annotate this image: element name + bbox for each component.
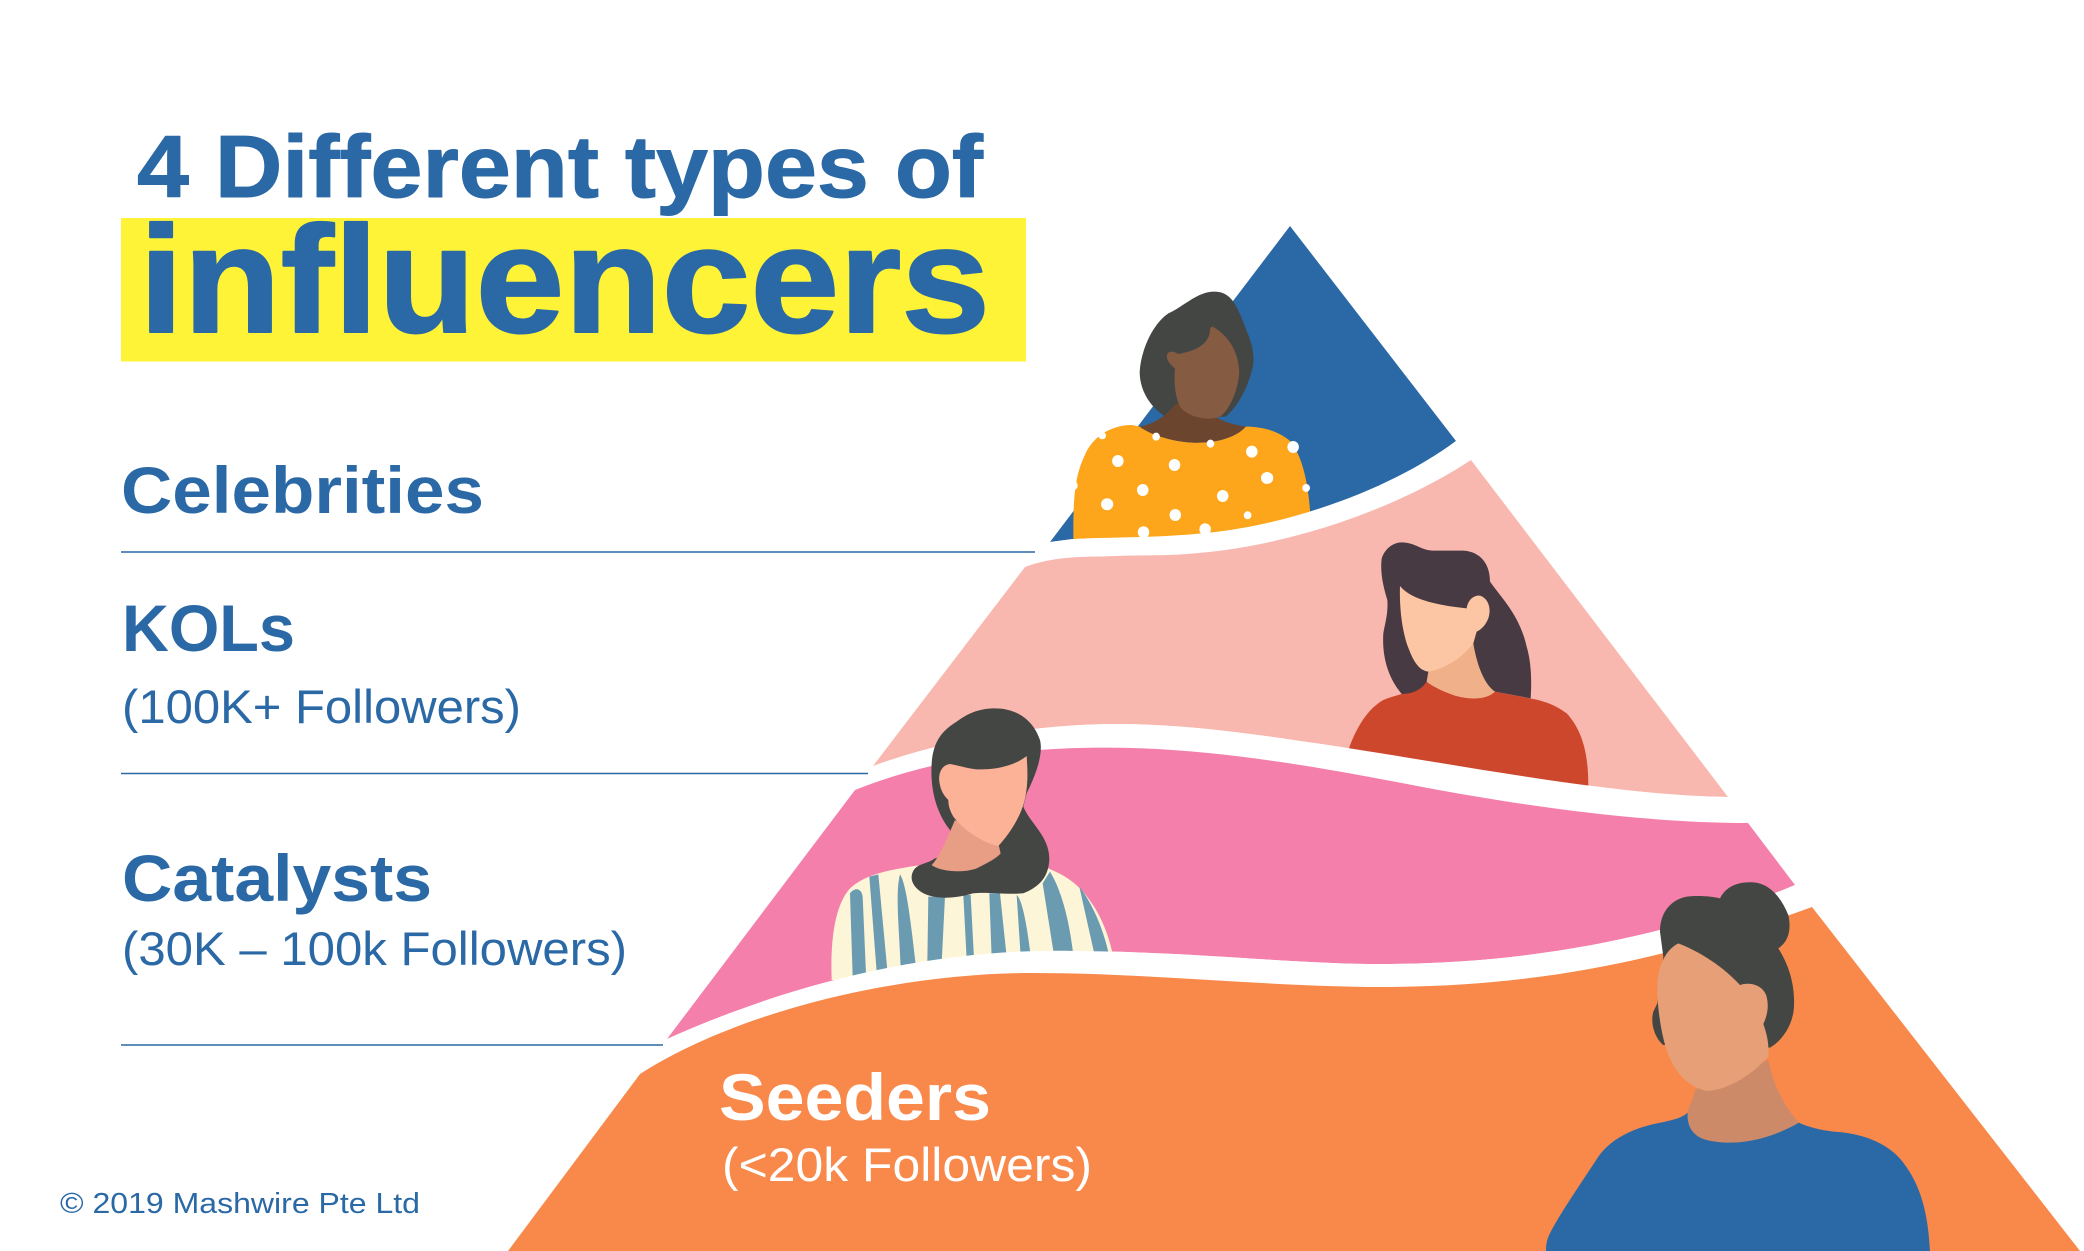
title line 2: influencers (139, 195, 990, 365)
label: KOLs (122, 591, 521, 733)
tier: catalysts (pink) (667, 748, 1795, 1039)
person: celebrity (1072, 292, 1310, 547)
tier: KOLs (light pink) (873, 460, 1728, 797)
tier: celebrities (blue) (1050, 226, 1456, 542)
person: KOL (1347, 542, 1588, 800)
person: seeder (1546, 882, 1930, 1251)
pyramid (508, 226, 2080, 1251)
tier: seeders (orange) (508, 907, 2080, 1251)
title (121, 117, 1026, 365)
label: catalysts: Catalysts (122, 841, 432, 915)
divider line: celebrities (121, 551, 1035, 553)
white wave divider 3 (640, 885, 1812, 1074)
label: seeders (719, 1060, 1092, 1191)
label: catalysts (122, 841, 627, 975)
divider line: catalysts (121, 1044, 663, 1046)
label: KOLs: (100K+ Followers) (122, 680, 521, 733)
label: celebrities: Celebrities (121, 453, 484, 527)
divider line: KOLs (121, 772, 868, 774)
person: catalyst (831, 708, 1113, 980)
highlight box (121, 218, 1026, 362)
white wave divider 2 (850, 724, 1760, 830)
label: KOLs: KOLs (122, 591, 295, 665)
label: catalysts: (30K – 100k Followers) (122, 922, 627, 975)
title line 1: 4 Different types of (137, 117, 984, 216)
label: seeders: Seeders (719, 1060, 991, 1134)
white wave divider 1 (1000, 441, 1500, 600)
copyright: © 2019 Mashwire Pte Ltd (60, 1188, 420, 1220)
label: seeders: (<20k Followers) (722, 1138, 1092, 1191)
